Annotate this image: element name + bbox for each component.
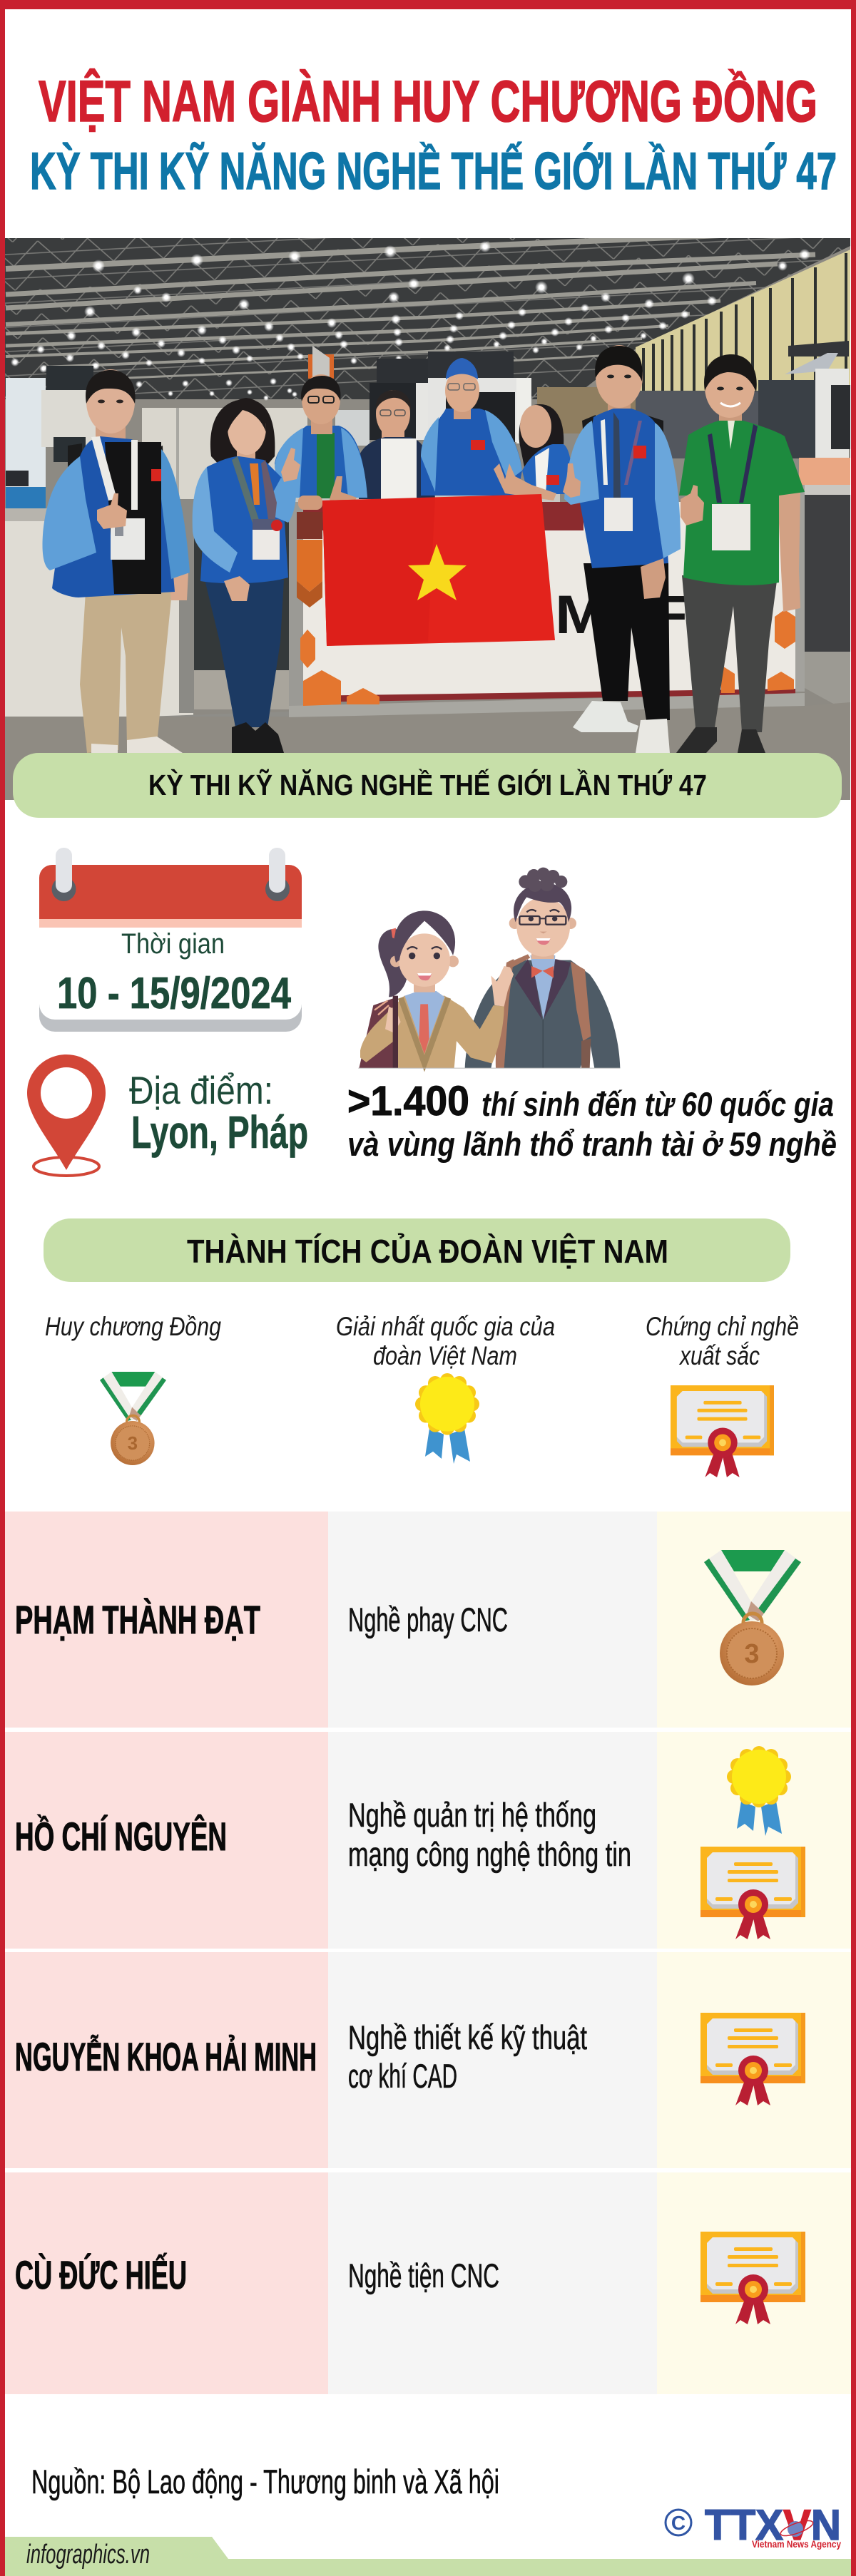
section banner: achievements: THÀNH TÍCH CỦA ĐOÀN VIỆT NAM [187,1233,668,1270]
title [30,69,837,200]
footer band with website: infographics.vn [26,2540,150,2570]
person 7: tall young man in blue jacket and black trousers [563,345,681,753]
table row: Phạm Thành Đạt: Nghề phay CNC [348,1601,508,1638]
table row: Nguyễn Khoa Hải Minh [5,1952,851,2168]
venue text: Lyon, Pháp [131,1107,308,1158]
section banner: competition [13,753,842,818]
legend: national first prize [336,1312,555,1464]
statistic: contestants: >1.400 [347,1078,469,1124]
legend: bronze medal [45,1312,221,1465]
illustration: two students [358,868,620,1069]
legend: bronze medal: Huy chương Đồng [45,1312,221,1341]
left wall and floor of the photo [5,499,850,717]
logo: TTXVN Vietnam News Agency: C [671,2512,686,2534]
table row: Nguyễn Khoa Hải Minh: cơ khí CAD [348,2057,457,2095]
exhibition counter [289,485,805,717]
table row: Hồ Chí Nguyên: Nghề quản trị hệ thống [348,1796,596,1834]
statistic: contestants [347,1078,837,1163]
person 4: man in navy blazer [359,390,435,499]
section banner: achievements [44,1218,790,1282]
person 8: young man in green polo and grey trousers [676,354,805,753]
photo: Vietnamese delegation holding the flag in the exhibition hall [5,230,850,801]
legend: national first prize: đoàn Việt Nam [373,1341,517,1370]
table row: Cù Đức Hiếu [5,2172,851,2394]
source note: Nguồn: Bộ Lao động - Thương binh và Xã hội [31,2463,499,2500]
table row: Hồ Chí Nguyên: HỒ CHÍ NGUYÊN [15,1814,227,1859]
table row: Nguyễn Khoa Hải Minh: Nghề thiết kế kỹ thuật [348,2018,587,2056]
calendar: time of the competition: Thời gian [121,928,225,960]
venue text [129,1068,308,1158]
person 1: young man in blue jacket and beige trousers [42,369,190,753]
venue text: Địa điểm: [129,1068,273,1112]
legend: certificate of excellence: xuất sắc [678,1341,760,1370]
logo: TTXVN Vietnam News Agency: Vietnam News Agency [752,2538,841,2550]
legend: national first prize: Giải nhất quốc gia của [336,1312,555,1341]
calendar: time of the competition: 10 - 15/9/2024 [57,969,291,1018]
table row: Hồ Chí Nguyên: mạng công nghệ thông tin [348,1835,631,1873]
legend: certificate of excellence: Chứng chỉ nghề [646,1312,799,1341]
table row: Hồ Chí Nguyên [5,1732,851,1949]
calendar: time of the competition [39,848,302,1032]
table row: Phạm Thành Đạt [5,1512,851,1728]
flag of Viet Nam [322,494,555,646]
table row: Cù Đức Hiếu: Nghề tiện CNC [348,2257,499,2294]
footer band with website [5,2537,851,2576]
table row: Nguyễn Khoa Hải Minh: NGUYỄN KHOA HẢI MINH [15,2034,317,2079]
person 3: young man with glasses [275,374,367,510]
person 2: woman in blue jacket and jeans [193,398,300,753]
icon: location pin [27,1054,106,1176]
section banner: competition: KỲ THI KỸ NĂNG NGHỀ THẾ GIỚI LẦN THỨ 47 [148,769,707,801]
table row: Cù Đức Hiếu: CÙ ĐỨC HIẾU [15,2252,187,2297]
logo: TTXVN Vietnam News Agency: TTXVN [705,2501,841,2549]
person 6: woman with long hair [494,404,573,501]
legend: certificate of excellence [646,1312,799,1477]
exhibition counter: MAF [555,585,688,645]
person 5: young man in blue cap [421,358,522,496]
table row: Phạm Thành Đạt: PHẠM THÀNH ĐẠT [15,1597,260,1642]
